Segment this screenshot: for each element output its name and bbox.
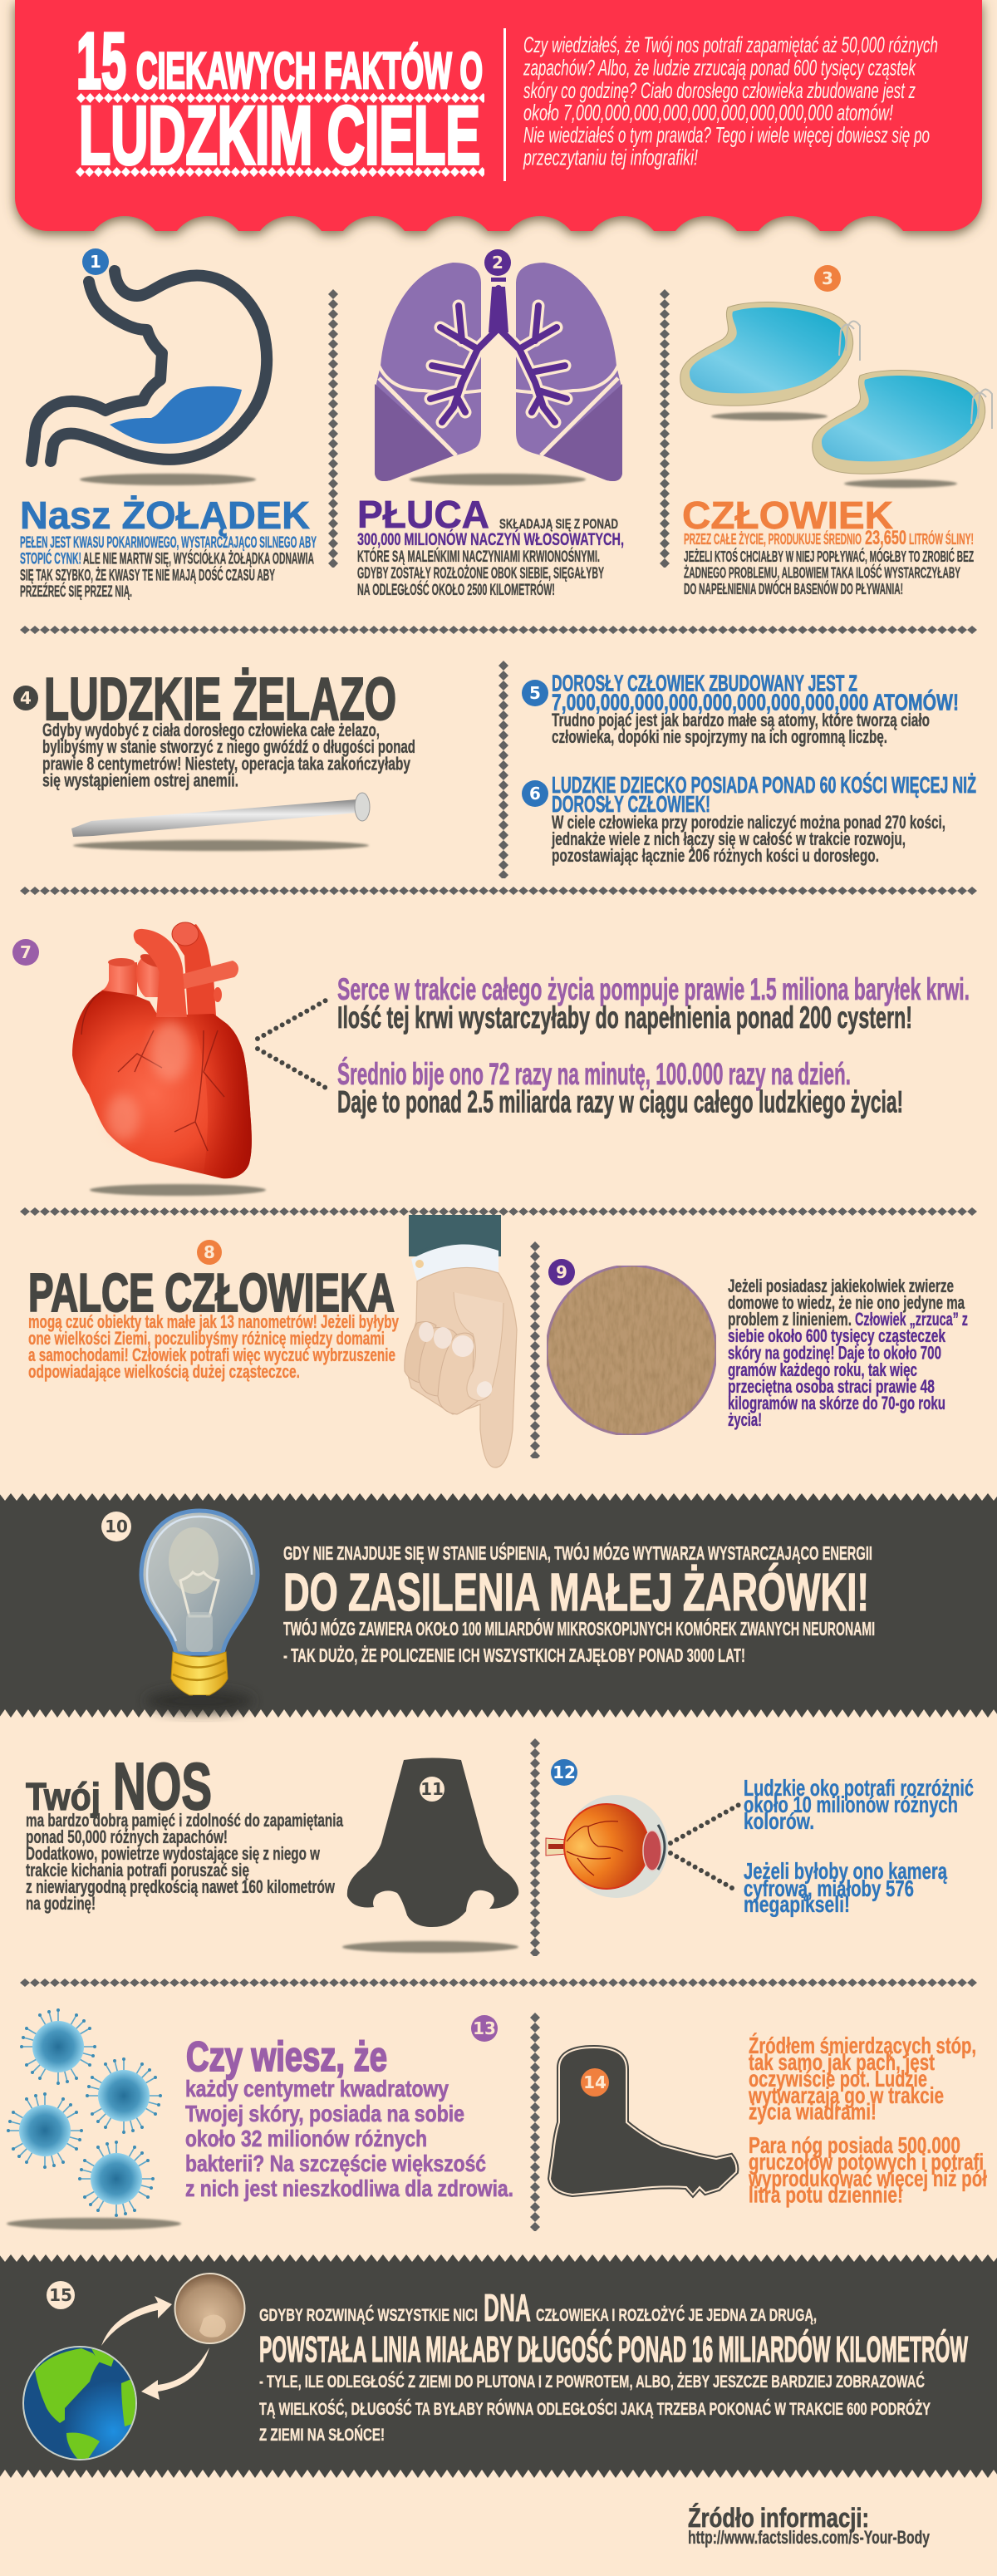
body text: ponad 50,000 różnych zapachów! — [26, 1826, 228, 1847]
icon: bacteria — [7, 2010, 181, 2229]
badge 14: 14 — [583, 2072, 607, 2092]
badge 2 — [484, 249, 511, 276]
body text: GDYBY ZOSTAŁY ROZŁOŻONE OBOK SIEBIE, SIĘGAŁYBY — [357, 565, 604, 583]
badge 15 — [47, 2281, 75, 2309]
fact: sweat — [748, 2033, 976, 2124]
connector dots — [670, 1804, 740, 1891]
body text: bakterii? Na szczęście większość — [185, 2151, 486, 2176]
title: LUDZKIM CIELE — [79, 89, 480, 181]
heading: LUDZKIE ŻELAZO — [44, 666, 396, 733]
body text — [185, 2076, 513, 2201]
body text: - TAK DUŻO, ŻE POLICZENIE ICH WSZYSTKICH ZAJĘŁOBY PONAD 3000 LAT! — [283, 1644, 745, 1666]
body text: życia! — [728, 1409, 762, 1430]
badge 13: 13 — [473, 2018, 496, 2038]
panel: foot — [550, 2033, 987, 2207]
body text: bylibyśmy w stanie stworzyć z niego gwóźdź o długości ponad — [42, 736, 415, 757]
body text: a samochodami! Człowiek potrafi więc wyczuć wybrzuszenie — [28, 1345, 395, 1365]
body text: mogą czuć obiekty tak małe jak 13 nanometrów! Jeżeli byłyby — [28, 1311, 399, 1332]
body text: każdy centymetr kwadratowy — [185, 2076, 449, 2102]
icon: nail — [71, 793, 370, 851]
badge 5 — [522, 680, 548, 706]
icon: foot — [550, 2048, 736, 2195]
heading: Czy wiesz, że — [186, 2033, 387, 2080]
body text — [42, 720, 415, 791]
icon: eye — [546, 1795, 668, 1898]
body text — [20, 534, 317, 601]
heading: DOROSŁY CZŁOWIEK! — [552, 791, 710, 817]
icon: light bulb — [141, 1511, 258, 1713]
badge 10: 10 — [105, 1517, 128, 1536]
icon: earth — [23, 2347, 137, 2461]
heading — [26, 1749, 212, 1823]
body text: około 32 milionów różnych — [185, 2126, 427, 2151]
title: CIEKAWYCH FAKTÓW O — [136, 42, 483, 99]
fact: megapixels: cyfrową, miałoby 576 — [744, 1875, 914, 1901]
badge 13 — [471, 2015, 498, 2042]
badge 10 — [101, 1512, 131, 1541]
body text: prawie 8 centymetrów! Niestety, operacja taka zakończyłaby — [42, 753, 410, 774]
body text: z niewiarygodną prędkością nawet 160 kilometrów — [26, 1876, 335, 1897]
body text: NA ODLEGŁOŚĆ OKOŁO 2500 KILOMETRÓW! — [357, 581, 555, 599]
badge 2: 2 — [492, 253, 503, 273]
icon: nose — [342, 1758, 518, 1953]
badge 1 — [82, 248, 109, 275]
body text: SIĘ TAK SZYBKO, ŻE KWASY TE NIE MAJĄ DOŚĆ CZASU ABY — [20, 567, 275, 585]
body text: CZŁOWIEKA I ROZŁOŻYĆ JE JEDNA ZA DRUGĄ, — [536, 2305, 817, 2325]
body text — [283, 1541, 875, 1666]
fact: beats — [337, 1056, 903, 1118]
heading: Twój — [26, 1775, 101, 1818]
badge 7 — [12, 939, 39, 966]
icon: pointing hand — [405, 1215, 517, 1467]
body text: PRZEŹREĆ SIĘ PRZEZ NIĄ. — [20, 583, 132, 601]
title: 15 — [76, 17, 126, 106]
heading — [552, 670, 959, 715]
body text: na godzinę! — [26, 1893, 96, 1914]
icon: heart — [72, 922, 266, 1196]
body text: PEŁEN JEST KWASU POKARMOWEGO, WYSTARCZAJĄCO SILNEGO ABY — [20, 534, 317, 552]
badge 15: 15 — [49, 2285, 72, 2305]
icon: swimming pools — [680, 302, 992, 488]
icon: lungs — [375, 263, 622, 485]
badge 12 — [551, 1759, 577, 1786]
arrow: earth to pluto — [101, 2296, 172, 2346]
header banner — [15, 0, 982, 231]
body text — [684, 527, 974, 597]
connector dots — [258, 1000, 326, 1088]
body text: odpowiadające wielkością dużej cząsteczce. — [28, 1361, 300, 1382]
body text: z nich jest nieszkodliwa dla zdrowia. — [185, 2175, 513, 2201]
badge 9 — [548, 1259, 575, 1286]
source — [688, 2503, 931, 2548]
heading: PALCE CZŁOWIEKA — [28, 1262, 395, 1323]
badge 6 — [522, 780, 548, 807]
panel: bacteria — [7, 2010, 513, 2229]
body text — [26, 1810, 343, 1914]
fact: megapixels — [744, 1858, 947, 1917]
fact: glands: litra potu dziennie! — [749, 2182, 903, 2207]
fact: glands — [748, 2132, 987, 2207]
panel: heart — [12, 922, 970, 1196]
body text: SKŁADAJĄ SIĘ Z PONAD — [499, 516, 618, 532]
heading — [552, 772, 976, 817]
badge 7: 7 — [20, 942, 32, 962]
body text: 300,000 MILIONÓW NACZYŃ WŁOSOWATYCH, — [357, 529, 624, 549]
panel: atoms — [522, 670, 959, 747]
fact: sweat: tak samo jak pach, jest — [749, 2049, 935, 2075]
panel: eye — [546, 1759, 974, 1917]
heading: PŁUCA — [357, 493, 489, 536]
panel: fingers — [28, 1215, 517, 1467]
heading: CZŁOWIEK — [682, 494, 893, 537]
body text: STOPIĆ CYNK! — [20, 550, 81, 568]
body text: GDYBY ROZWINĄĆ WSZYSTKIE NICI — [259, 2305, 478, 2325]
panel: DNA band — [0, 2254, 997, 2478]
body text: Dodatkowo, powietrze wydostające się z niego w — [26, 1843, 320, 1864]
body text: gramów każdego roku, tak więc — [728, 1359, 917, 1380]
fact: colours: kolorów. — [744, 1808, 814, 1834]
body text: Gdyby wydobyć z ciała dorosłego człowieka całe żelazo, — [42, 720, 380, 740]
body text: ALE NIE MARTW SIĘ, WYŚCIÓŁKA ŻOŁĄDKA ODNAWIA — [83, 550, 314, 568]
badge 5: 5 — [529, 683, 541, 703]
body text — [552, 710, 930, 747]
body text: DNA — [484, 2286, 531, 2329]
body text: Twojej skóry, posiada na sobie — [185, 2101, 464, 2126]
panel: lungs — [357, 249, 624, 599]
source: Źródło informacji: — [688, 2503, 869, 2533]
panel: iron — [13, 666, 415, 851]
body text: problem z linieniem. — [728, 1309, 852, 1330]
body text — [357, 516, 624, 599]
badge 4: 4 — [20, 688, 32, 708]
badge 9: 9 — [556, 1262, 567, 1282]
body text: 23,650 — [865, 527, 906, 549]
panel: brain band — [0, 1493, 997, 1718]
body text — [551, 812, 945, 866]
header background — [15, 0, 982, 231]
body text: KTÓRE SĄ MALEŃKIMI NACZYNIAMI KRWIONOŚNYMI. — [357, 548, 600, 566]
badge 3: 3 — [822, 268, 833, 288]
heading: Nasz ŻOŁĄDEK — [20, 494, 310, 537]
panel: skin — [547, 1259, 968, 1435]
body text — [28, 1311, 399, 1382]
body text: trakcie kichania potrafi poruszać się — [26, 1860, 249, 1880]
body text: ma bardzo dobrą pamięć i zdolność do zapamiętania — [26, 1810, 343, 1831]
body text: się wystąpieniem ostrej anemii. — [42, 770, 238, 791]
badge 6: 6 — [529, 784, 541, 804]
badge 12: 12 — [553, 1762, 576, 1782]
panel: stomach — [20, 248, 317, 601]
body text: PRZEZ CAŁE ŻYCIE, PRODUKUJE ŚREDNIO — [684, 530, 862, 548]
fact: sweat: oczywiście pot. Ludzie — [749, 2066, 927, 2092]
title — [76, 17, 484, 181]
body text: one wielkości Ziemi, poczulibyśmy różnicę między domami — [28, 1328, 385, 1349]
fact: sweat: życia wiadrami! — [749, 2099, 877, 2124]
fact: colours — [744, 1775, 974, 1834]
intro text: przeczytaniu tej infografiki! — [523, 145, 698, 170]
icon: stomach — [32, 271, 267, 485]
badge 4 — [13, 686, 38, 710]
arrow: pluto to earth — [141, 2347, 209, 2400]
icon: skin circle — [547, 1266, 716, 1435]
intro text — [523, 32, 938, 170]
icon: pluto — [174, 2274, 244, 2343]
badge 8: 8 — [204, 1242, 215, 1262]
fact: megapixels: megapikseli! — [744, 1891, 850, 1917]
body text — [259, 2286, 968, 2445]
panel: nose — [26, 1749, 518, 1953]
badge 3 — [814, 265, 841, 292]
heading: NOS — [113, 1749, 212, 1823]
body text: Z ZIEMI NA SŁOŃCE! — [259, 2426, 385, 2445]
panel: bones — [522, 772, 976, 866]
fact: blood — [337, 972, 970, 1035]
badge 8 — [197, 1240, 222, 1265]
badge 11: 11 — [420, 1779, 444, 1799]
badge 1: 1 — [90, 252, 101, 272]
panel: saliva and pools — [680, 265, 992, 597]
body text — [728, 1276, 968, 1430]
badge 14 — [581, 2068, 609, 2097]
